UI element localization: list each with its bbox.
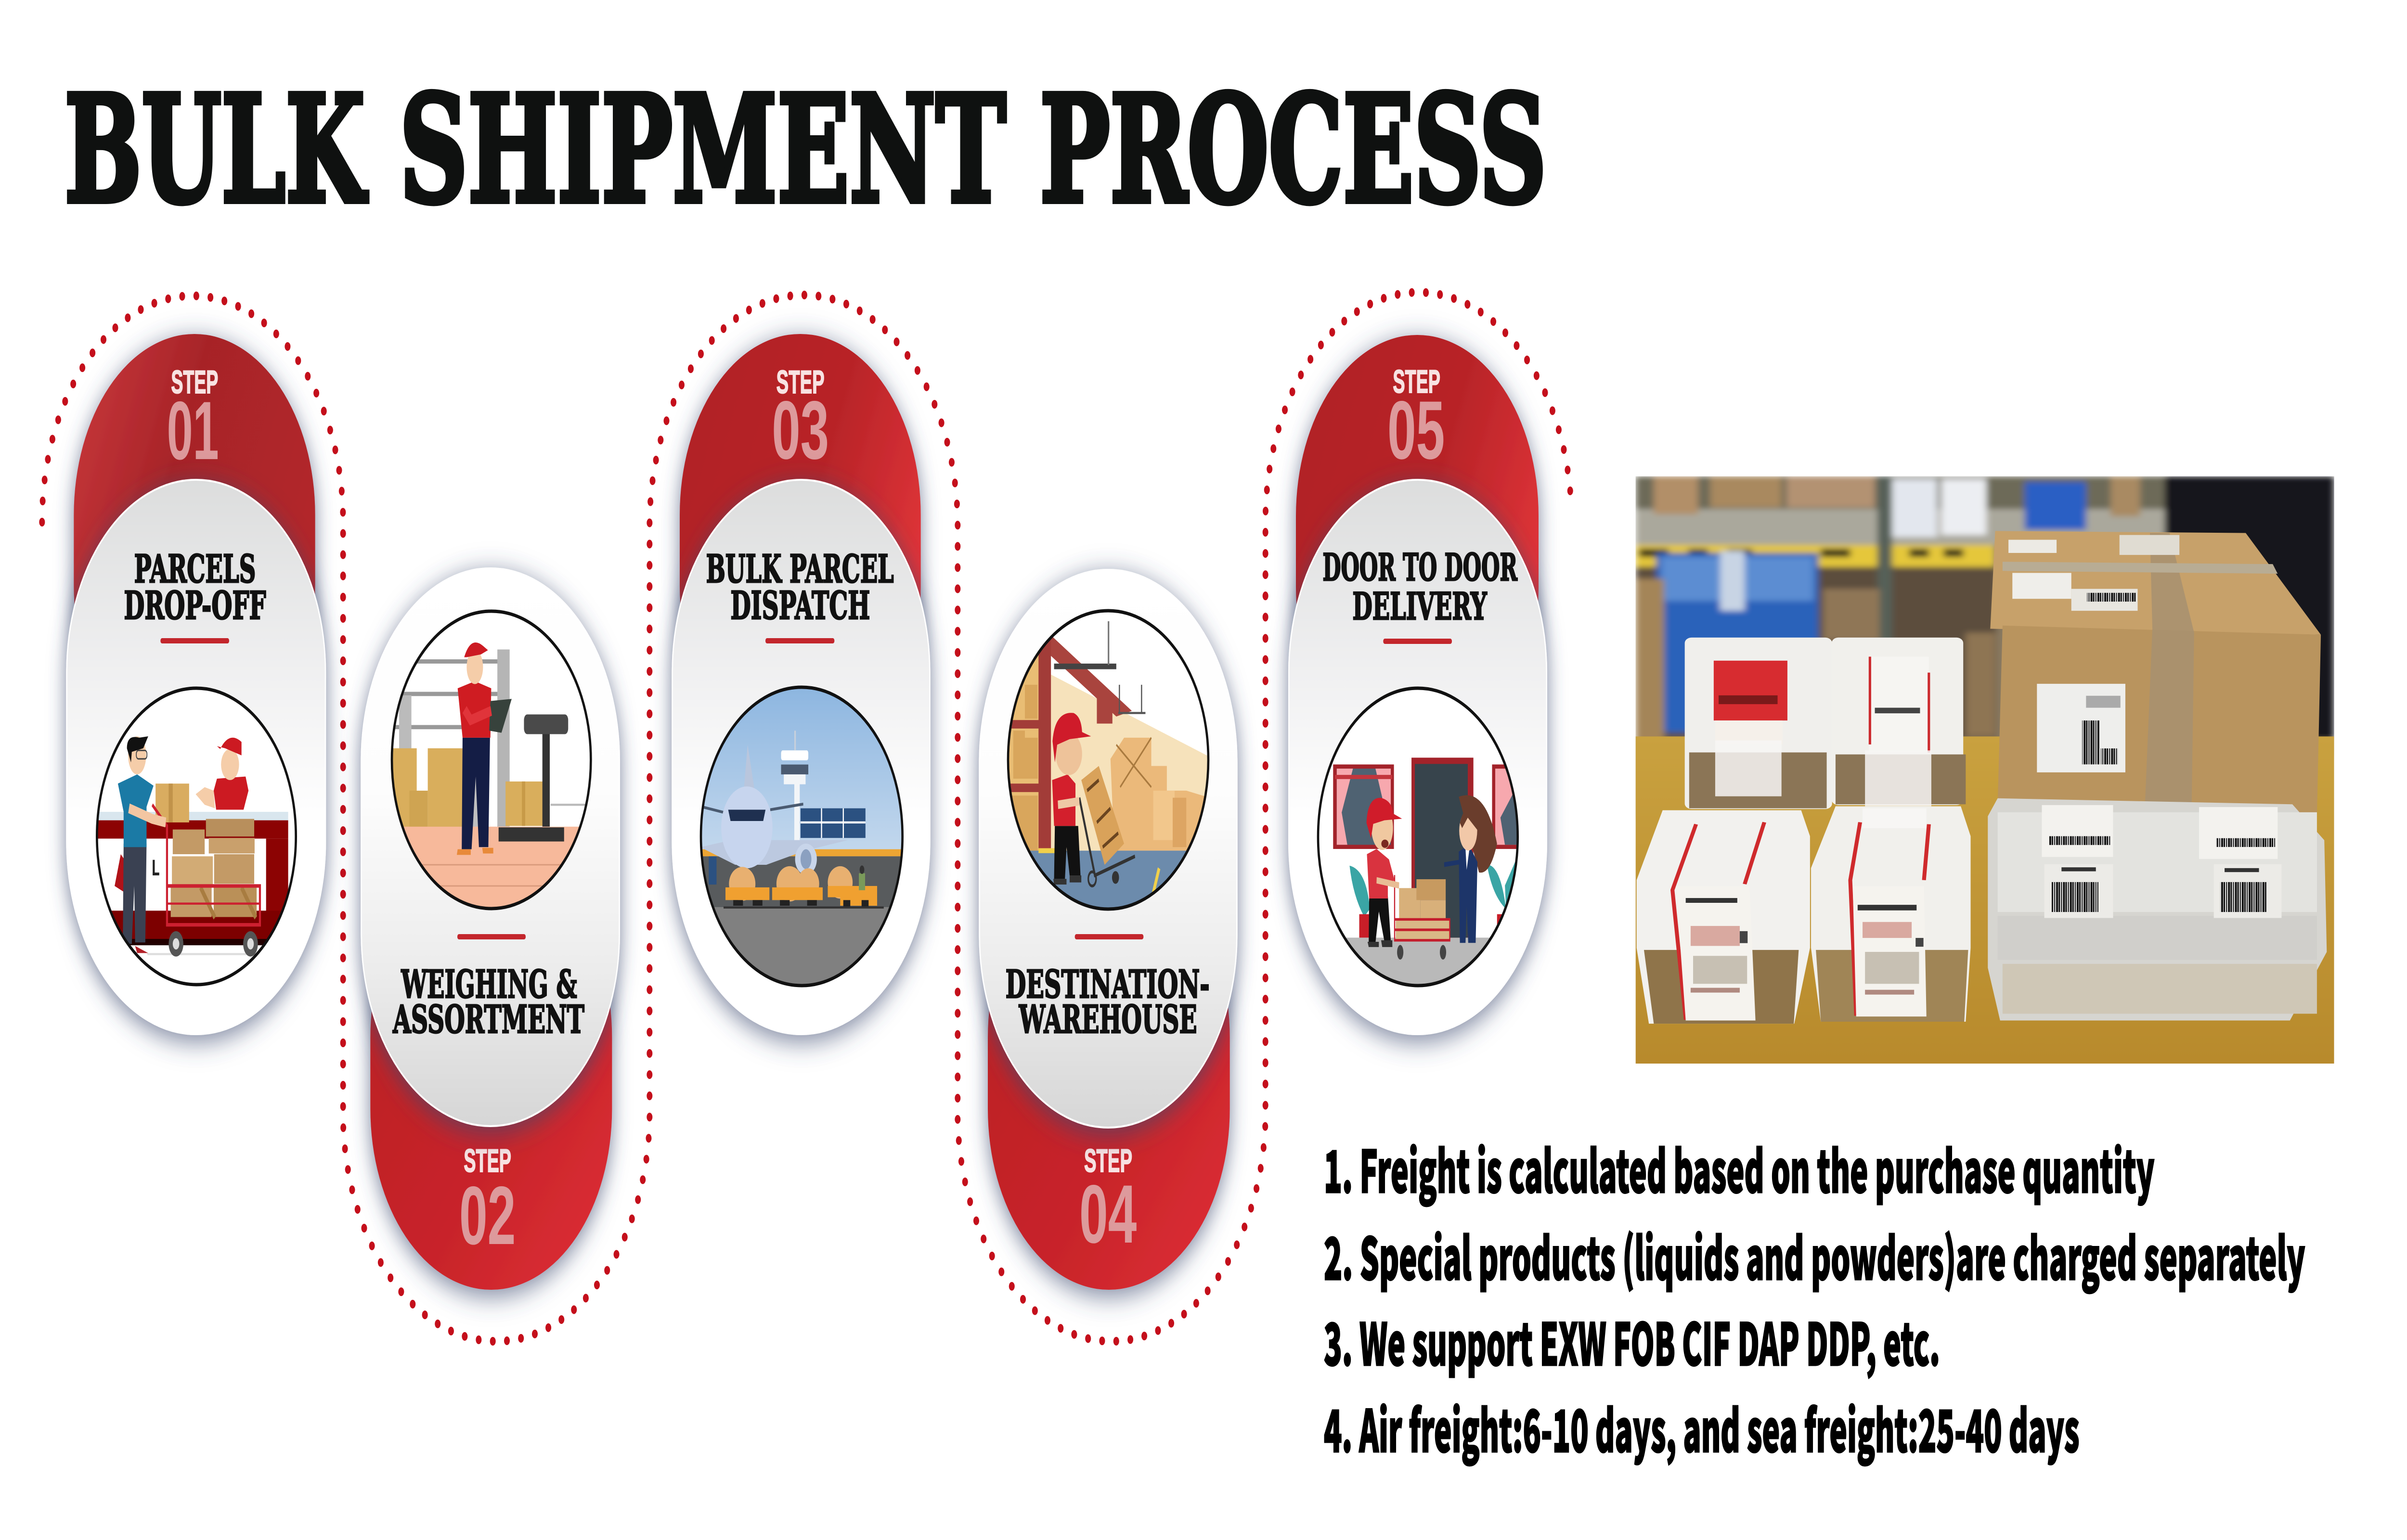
title: BULK (65, 64, 368, 236)
underline step 4 (1075, 934, 1143, 939)
white pill step 1 (67, 480, 325, 1034)
step 3 label: STEP (776, 364, 825, 400)
red tab step 1 (74, 334, 315, 767)
illustration: weighing (393, 642, 585, 907)
red tab step 3 (680, 334, 921, 767)
illustration ring step 1 (97, 688, 296, 985)
notes text block: 1. Freight is calculated based on the purchase quantity (1324, 1126, 2154, 1209)
underline step 3 (765, 638, 834, 643)
heading step 1: DROP-OFF (124, 583, 266, 629)
heading step 5 (1322, 545, 1518, 629)
step 4 label: STEP (1084, 1143, 1132, 1179)
back right package (1832, 638, 1966, 806)
heading step 2: ASSORTMENT (392, 997, 584, 1042)
heading step 4: WAREHOUSE (1019, 997, 1197, 1042)
front left package (1637, 810, 1810, 1024)
step 3 number: 03 (772, 384, 829, 476)
heading step 2: WEIGHING & (401, 962, 577, 1007)
heading step 5: DELIVERY (1352, 584, 1487, 629)
step 5 number: 05 (1387, 384, 1445, 476)
red tab step 2 (370, 857, 612, 1290)
dotted connector path (42, 292, 1571, 1341)
panel: step 3 (673, 334, 930, 1034)
heading step 3 (706, 547, 894, 629)
panel: step 2 (362, 568, 620, 1290)
illustration ring step 2 (392, 611, 591, 909)
title: SHIPMENT (400, 64, 1006, 236)
illustration: parcel drop-off counter (98, 690, 288, 957)
illustration: destination warehouse (1006, 611, 1214, 914)
notes text block: 3. We support EXW FOB CIF DAP DDP, etc. (1324, 1299, 1940, 1382)
title (65, 64, 1547, 236)
illustration: door to door delivery (1317, 688, 1520, 990)
heading step 1: PARCELS (134, 547, 256, 592)
step 1 number: 01 (167, 385, 219, 476)
front middle package (1811, 806, 1971, 1022)
heading step 4: DESTINATION- (1006, 962, 1210, 1007)
illustration ring step 4 (1008, 611, 1208, 909)
red tab step 5 (1296, 335, 1539, 768)
heading step 5: DOOR TO DOOR (1322, 545, 1518, 590)
panel: step 4 (980, 570, 1237, 1290)
illustration: airport cargo (700, 688, 903, 988)
red tab step 4 (988, 857, 1230, 1290)
illustration ring step 5 (1318, 688, 1518, 986)
photo: packed parcels on table (1636, 476, 2334, 1064)
white pill step 2 (362, 568, 620, 1126)
heading step 1 (124, 547, 266, 629)
notes text block: 4. Air freight:6-10 days, and sea freight:25-40 days (1324, 1386, 2079, 1469)
step 2 number: 02 (459, 1169, 516, 1261)
heading step 3: BULK PARCEL (706, 547, 894, 592)
underline step 2 (457, 934, 526, 939)
step 4 number: 04 (1079, 1168, 1137, 1260)
notes text block: 2. Special products (liquids and powders)are charged separately (1324, 1213, 2305, 1296)
back left package (1685, 638, 1832, 809)
underline step 1 (160, 638, 229, 643)
white pill step 4 (980, 570, 1237, 1128)
notes text block (1324, 1126, 2305, 1469)
step 5 label: STEP (1393, 364, 1440, 400)
underline step 5 (1383, 639, 1452, 644)
step 1 label: STEP (171, 364, 218, 400)
panel: step 5 (1289, 335, 1547, 1034)
panel: step 1 (67, 334, 325, 1034)
white pill step 5 (1289, 480, 1547, 1034)
cardboard box (1990, 531, 2321, 816)
heading step 2 (392, 962, 584, 1042)
heading step 4 (1006, 962, 1210, 1042)
wrapped parcel (1988, 798, 2327, 1021)
title: PROCESS (1040, 64, 1547, 236)
heading step 3: DISPATCH (730, 583, 870, 629)
white pill step 3 (673, 480, 930, 1034)
illustration ring step 3 (701, 687, 903, 986)
step 2 label: STEP (464, 1143, 511, 1179)
